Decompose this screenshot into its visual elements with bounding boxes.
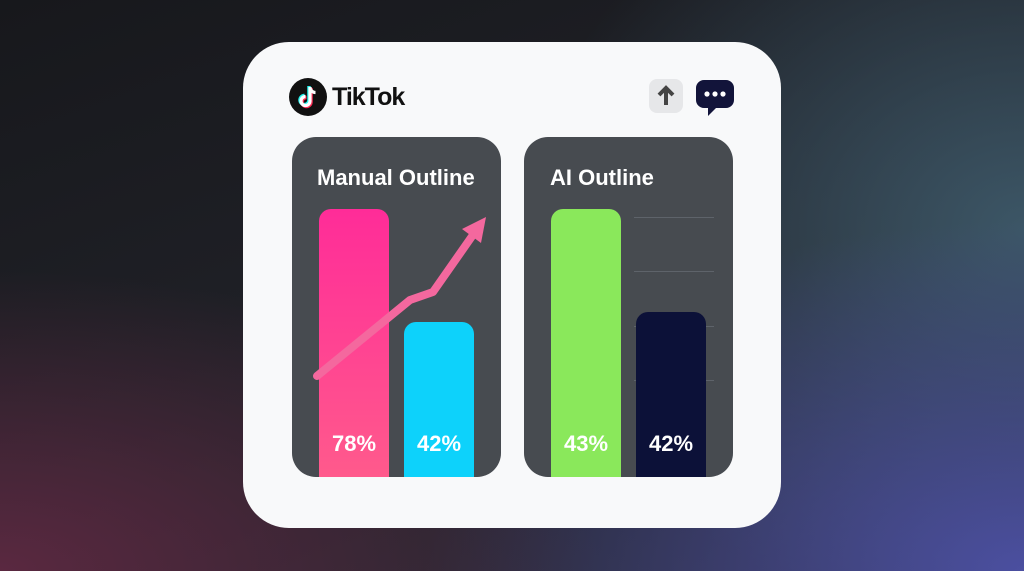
label 42: 42%: [417, 431, 461, 456]
panel: manual outline: [292, 137, 501, 477]
label 78: 78%: [332, 431, 376, 456]
logo: tiktok: [289, 78, 406, 116]
panel: ai outline: [524, 137, 733, 477]
label 43: 43%: [564, 431, 608, 456]
bar: 78%: [319, 209, 389, 477]
icon: chat bubble: [696, 80, 734, 116]
heading: Manual Outline: [317, 165, 475, 190]
icon: tiktok note: [289, 78, 327, 116]
label 42: 42%: [649, 431, 693, 456]
heading: AI Outline: [550, 165, 654, 190]
bar: 42%: [404, 322, 474, 477]
brand name: TikTok: [332, 83, 404, 111]
icon: upload arrow: [649, 79, 683, 113]
card: [243, 42, 781, 528]
bar: 42%: [636, 312, 706, 477]
bar: 43%: [551, 209, 621, 477]
